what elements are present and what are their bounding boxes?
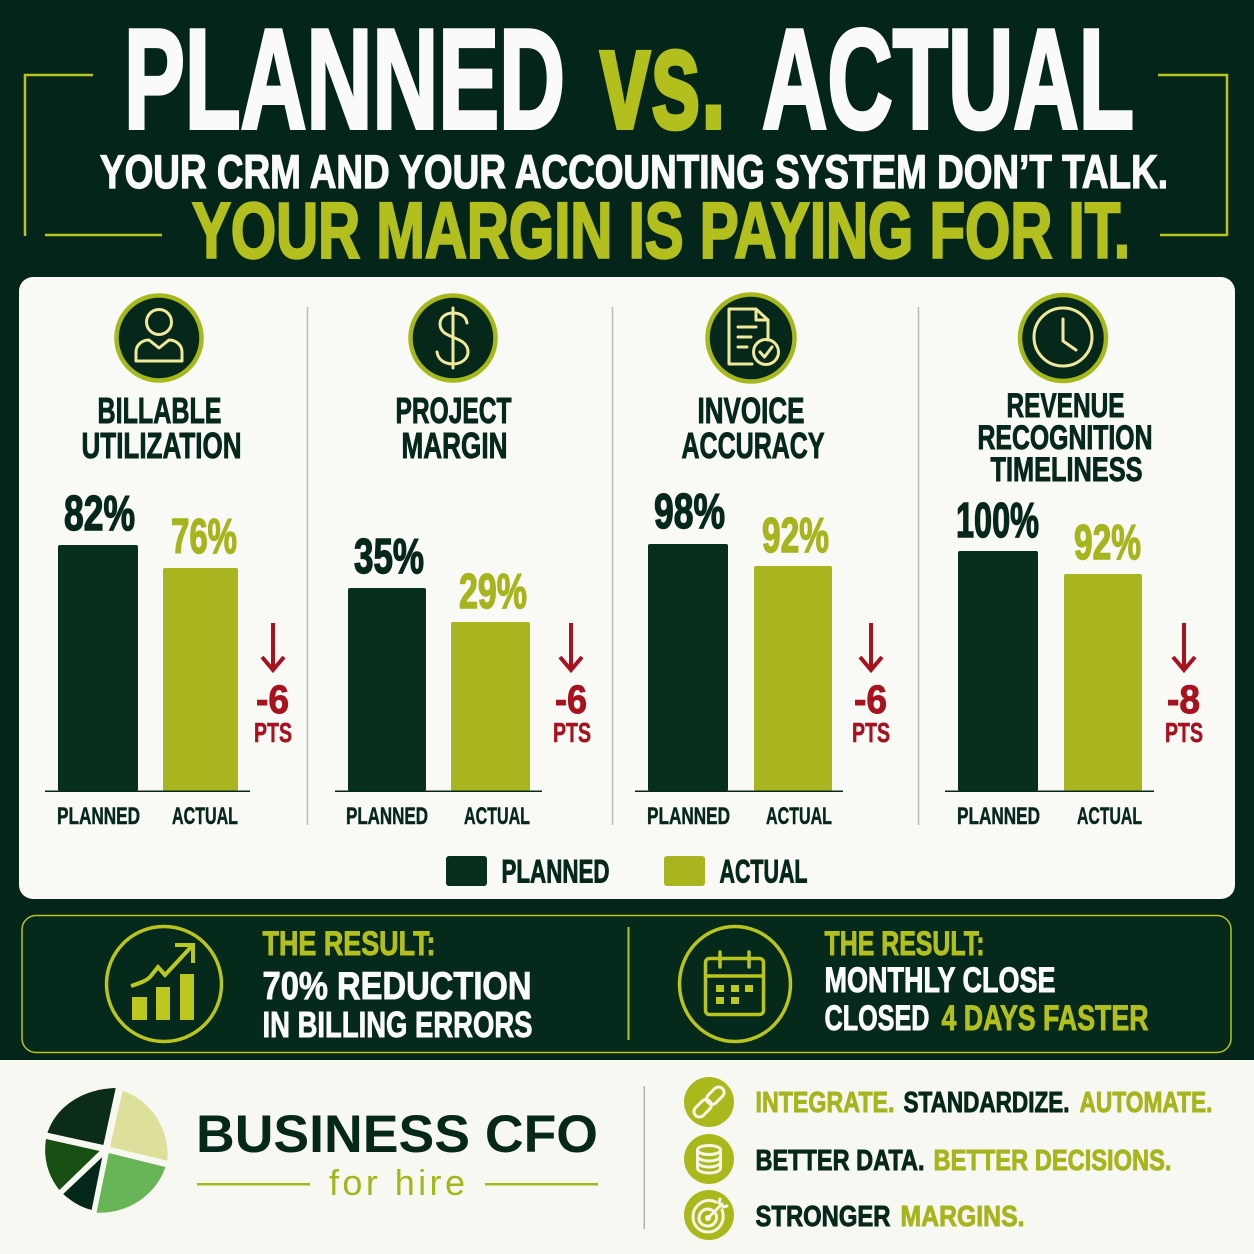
delta: minus 6 points xyxy=(553,623,591,748)
result text: CLOSED xyxy=(824,999,930,1038)
delta: minus 6 points: PTS xyxy=(553,717,591,748)
tagline text xyxy=(756,1145,1172,1177)
result text: 4 DAYS FASTER xyxy=(942,999,1148,1038)
bar chart: ACTUAL xyxy=(172,803,238,830)
delta: minus 8 points: -8 xyxy=(1167,678,1200,722)
heading: MARGIN xyxy=(402,425,508,466)
tagline text: AUTOMATE. xyxy=(1080,1087,1212,1119)
delta: minus 6 points: PTS xyxy=(254,717,292,748)
icon: dollar xyxy=(410,296,496,380)
tagline text: BETTER DECISIONS. xyxy=(934,1145,1172,1177)
metric: project margin xyxy=(335,296,591,830)
delta: minus 6 points xyxy=(254,623,292,748)
icon: document check xyxy=(708,294,794,382)
bar chart: PLANNED xyxy=(346,803,428,830)
heading: REVENUE xyxy=(1006,387,1124,425)
bar chart: 92% xyxy=(1074,516,1141,570)
bar chart: ACTUAL xyxy=(1077,803,1142,830)
heading: INVOICE xyxy=(698,390,804,431)
heading xyxy=(978,387,1152,489)
heading: ACCURACY xyxy=(682,425,824,466)
header bracket: right xyxy=(1158,75,1227,236)
panel: results xyxy=(22,916,1231,1052)
delta: minus 6 points xyxy=(852,623,890,748)
icon: clock xyxy=(1020,295,1106,381)
result text: IN BILLING ERRORS xyxy=(262,1004,532,1045)
result text: THE RESULT: xyxy=(262,925,436,963)
bar chart: PLANNED xyxy=(57,803,140,830)
heading: UTILIZATION xyxy=(82,425,242,466)
tagline text: BETTER DATA. xyxy=(756,1145,924,1177)
bar chart: PLANNED xyxy=(647,803,730,830)
bar chart xyxy=(945,494,1154,830)
tagline text xyxy=(756,1201,1024,1233)
header title xyxy=(124,0,1134,159)
tagline text: INTEGRATE. xyxy=(756,1087,894,1119)
bar chart: 100% xyxy=(956,494,1039,548)
panel: metrics xyxy=(19,277,1235,899)
logo: wordmark xyxy=(196,1105,598,1203)
tagline text: MARGINS. xyxy=(900,1201,1024,1233)
result text xyxy=(262,925,532,1045)
legend: PLANNED xyxy=(502,854,610,890)
metric: billable utilization xyxy=(45,296,292,830)
heading xyxy=(682,390,824,466)
bar chart: ACTUAL xyxy=(766,803,832,830)
bar chart: 29% xyxy=(459,565,527,619)
tagline text: STANDARDIZE. xyxy=(904,1087,1070,1119)
legend: ACTUAL xyxy=(720,854,808,890)
bar chart: ACTUAL xyxy=(464,803,530,830)
delta: minus 6 points: PTS xyxy=(852,717,890,748)
bar chart xyxy=(335,530,542,830)
result text: 70% REDUCTION xyxy=(262,965,532,1008)
tagline: stronger margins xyxy=(684,1190,1024,1240)
bar chart: 92% xyxy=(762,509,829,563)
delta: minus 6 points: -6 xyxy=(256,678,289,722)
metric: revenue recognition timeliness xyxy=(945,295,1203,830)
delta: minus 6 points: -6 xyxy=(555,678,587,722)
header bracket: left xyxy=(25,75,162,236)
metric: invoice accuracy xyxy=(635,294,890,830)
delta: minus 8 points xyxy=(1165,623,1203,748)
icon: chain link xyxy=(684,1077,734,1127)
logo: wordmark: for hire xyxy=(329,1162,465,1203)
heading: RECOGNITION xyxy=(978,419,1152,457)
tagline: better data xyxy=(684,1134,1172,1184)
logo: pie chart xyxy=(45,1088,168,1213)
icon: growth chart xyxy=(106,926,222,1042)
bar chart xyxy=(635,485,843,830)
heading xyxy=(82,390,242,466)
logo: wordmark: BUSINESS CFO xyxy=(196,1105,598,1164)
result: billing errors xyxy=(106,925,532,1045)
icon: person xyxy=(116,296,202,380)
result text: MONTHLY CLOSE xyxy=(824,961,1056,1000)
tagline: integrate xyxy=(684,1077,1212,1127)
bar chart xyxy=(45,487,250,830)
icon: database xyxy=(684,1134,734,1184)
icon: calendar xyxy=(680,926,790,1042)
heading: BILLABLE xyxy=(98,390,222,431)
delta: minus 6 points: -6 xyxy=(854,678,887,722)
header title: vs. xyxy=(600,0,726,159)
result text xyxy=(824,925,1148,1038)
result: monthly close xyxy=(680,925,1148,1042)
legend xyxy=(446,854,808,890)
tagline text xyxy=(756,1087,1212,1119)
result text: THE RESULT: xyxy=(824,925,984,963)
heading: TIMELINESS xyxy=(990,451,1142,489)
delta: minus 8 points: PTS xyxy=(1165,717,1203,748)
bar chart: PLANNED xyxy=(957,803,1040,830)
bar chart: 82% xyxy=(64,487,135,541)
header title: PLANNED xyxy=(124,0,565,159)
panel: footer xyxy=(0,1060,1254,1254)
bar chart: 35% xyxy=(354,530,424,584)
heading: PROJECT xyxy=(396,390,512,431)
bar chart: 76% xyxy=(171,510,237,564)
heading xyxy=(396,390,512,466)
bar chart: 98% xyxy=(654,485,725,539)
tagline text: STRONGER xyxy=(756,1201,891,1233)
icon: target xyxy=(684,1190,734,1240)
